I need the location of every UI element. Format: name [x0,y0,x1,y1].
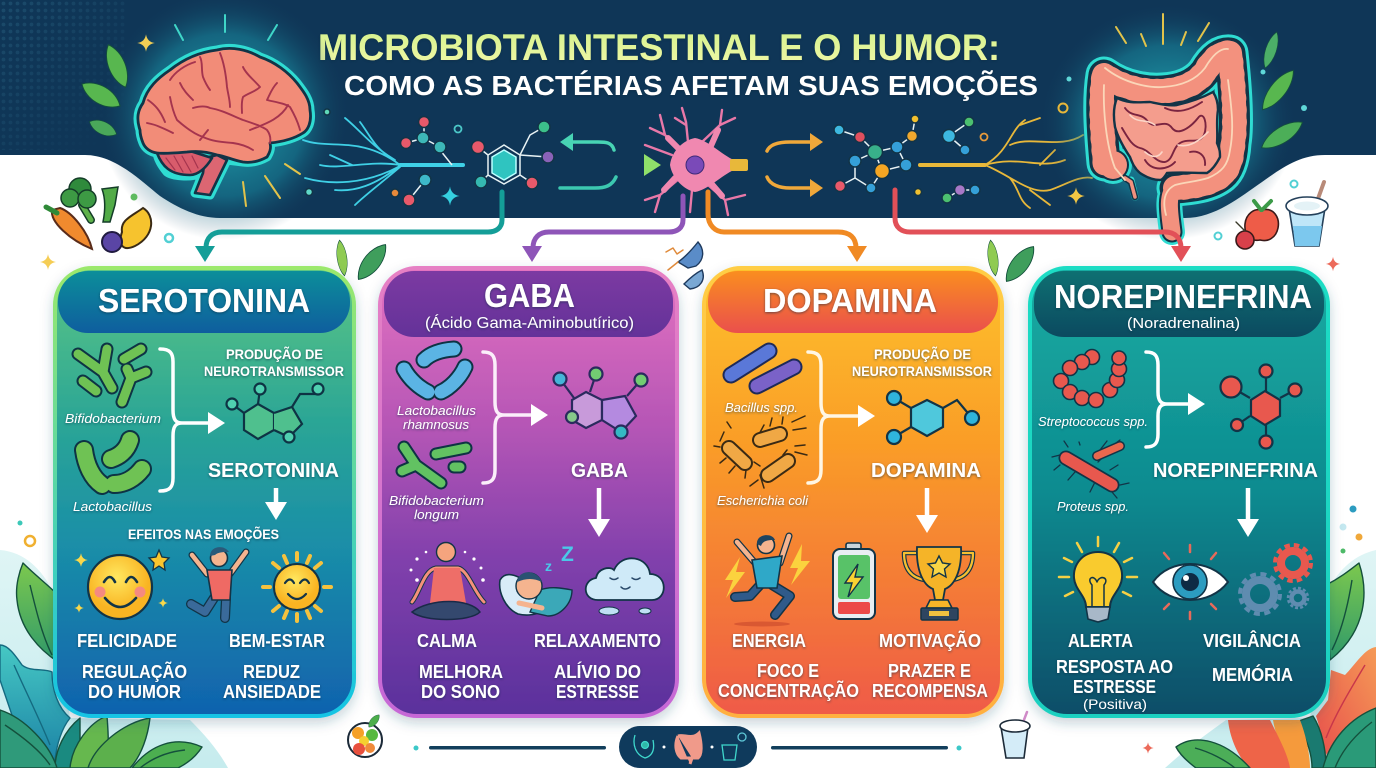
label: Lactobacillus rhamnosus: Lactobacillus [397,403,477,418]
effect labels: CONCENTRAÇÃO [718,680,859,701]
icon: fruit bowl [348,713,382,757]
label: Bifidobacterium longum [389,493,484,522]
effect labels: REGULAÇÃO [82,661,187,682]
panel heading: Norepinefrina: (Noradrenalina) [1127,315,1240,332]
panel heading: GABA [384,271,673,337]
text: Produção de neurotransmissor: PRODUÇÃO DE [226,345,323,362]
icon: GABA molecule [554,368,648,438]
effect labels [718,630,988,701]
connector: red arrow to Norepinefrina [895,190,1191,262]
icon: yogurt cup small [1000,712,1030,758]
label: Escherichia coli: Escherichia coli [717,493,809,508]
decoration: leaves above panels [335,239,1040,286]
text: Produção de neurotransmissor [852,345,992,379]
icon: Bacillus [731,351,794,386]
icon: Bifidobacterium longum [402,447,466,483]
label: Bifidobacterium: Bifidobacterium [65,411,161,426]
icon: Lactobacillus [84,440,142,485]
icon: dopamine molecule [887,391,979,444]
panel heading: Serotonina [58,271,350,333]
icon: norepinephrine molecule [1220,364,1302,448]
icon: synapse [666,242,703,289]
panel heading: Norepinefrina [1034,271,1324,337]
label: Bacillus spp.: Bacillus spp. [725,400,798,415]
label: Lactobacillus rhamnosus: rhamnosus [403,417,470,432]
icon: neuron [645,108,830,215]
effect labels: MOTIVAÇÃO [879,630,981,651]
effect labels: RESPOSTA AO [1056,657,1173,677]
icon: sun [263,553,331,621]
effect labels: RELAXAMENTO [534,631,661,651]
arrow: down [265,488,287,520]
effect labels: (Positiva) [1083,696,1147,712]
icon: Lactobacillus rhamnosus [404,349,465,392]
effect labels: DO SONO [421,682,500,702]
label: Streptococcus spp.: Streptococcus spp. [1038,414,1148,429]
title line 1: MICROBIOTA INTESTINAL E O HUMOR: [318,27,1000,68]
arrows: left feedback arrows [560,133,661,188]
icon: Z letters: z [545,558,552,574]
effect labels: VIGILÂNCIA [1203,630,1301,651]
decoration: footer line left [414,746,606,750]
icon: calm cloud [586,558,664,615]
effect labels: FELICIDADE [77,631,177,651]
text: Produção de neurotransmissor: NEUROTRANSMISSOR [852,363,992,379]
icon: Escherichia coli [714,416,807,488]
effect labels: REDUZ [243,662,300,682]
icon: eye [1153,545,1228,619]
effect labels: MELHORA [419,662,503,682]
effect labels: FOCO E [757,661,819,681]
icon: Z letters: Z [561,543,574,566]
nerve: left cyan branches [303,118,400,205]
panel heading: Norepinefrina: NOREPINEFRINA [1054,278,1312,315]
effect labels: PRAZER E [888,661,971,681]
panel: Dopamina [704,268,1002,716]
panel heading: Dopamina [708,271,998,333]
arrow: bracket to molecule [483,352,548,483]
decoration: footer line right [771,746,962,750]
arrow: bracket to molecule [160,349,225,491]
icon: meditating person [410,542,485,620]
text: Produção de neurotransmissor: PRODUÇÃO DE [874,345,971,362]
icon: light bulb [1059,537,1137,622]
header banner [0,0,1376,218]
label: Proteus spp.: Proteus spp. [1057,499,1129,514]
title line 2: COMO AS BACTÉRIAS AFETAM SUAS EMOÇÕES [344,70,1038,101]
effect labels: RECOMPENSA [872,681,988,701]
panel heading: GABA: GABA [484,277,575,314]
molecules: left cluster [306,109,554,206]
effect labels: MEMÓRIA [1212,664,1293,685]
effect labels: BEM-ESTAR [229,631,325,651]
label: Efeitos nas emoções: EFEITOS NAS EMOÇÕES [128,525,279,542]
label: Bifidobacterium longum: Bifidobacterium [389,493,484,508]
effect labels: CALMA [417,631,477,651]
icon: brain [99,0,349,240]
label: Serotonina: SEROTONINA [208,460,339,482]
icon: intestine leaves and sparks [1058,30,1307,205]
icon: vegetables [40,178,173,270]
effect labels: ESTRESSE [556,682,639,702]
icon: energetic person [725,535,810,626]
effect labels [1056,630,1301,712]
effect labels: ENERGIA [732,631,806,651]
effect labels: ANSIEDADE [223,682,321,702]
arrow: bracket to molecule [808,352,875,483]
title [318,27,1038,101]
effect labels: ESTRESSE [1073,677,1156,697]
arrow: down [1237,488,1259,537]
connector: orange arrow to Dopamina [708,192,867,262]
label: Norepinefrina: NOREPINEFRINA [1153,460,1318,482]
label: Lactobacillus rhamnosus [397,403,477,432]
effect labels [77,631,325,702]
effect labels: ALÍVIO DO [554,661,641,682]
effect labels [417,631,661,702]
text: Produção de neurotransmissor: NEUROTRANSMISSOR [204,363,344,379]
text: Produção de neurotransmissor [204,345,344,379]
effect labels: ALERTA [1068,631,1133,651]
arrows: right orange arrows [767,133,823,197]
icon: Z letters [545,543,574,574]
icon: battery [833,543,875,619]
arrow: down [916,488,938,533]
decoration: halftone dots [0,0,125,150]
label: Lactobacillus: Lactobacillus [73,499,153,514]
icon: apple and cherry [1236,201,1278,249]
icon: trophy [904,547,973,620]
icon: smiley [74,550,169,619]
effect labels: DO HUMOR [88,682,181,702]
icon: jumping person [191,547,246,618]
decoration: bottom-right foliage [1142,506,1376,768]
nerve: right yellow branches [920,118,1092,208]
connector: purple arrow to GABA [522,196,683,262]
icon: serotonin molecule [226,384,324,442]
panel: GABA [380,268,677,716]
icon: sleeping person [500,572,572,616]
panel: Norepinefrina [1030,268,1328,716]
decoration: bottom-left foliage [0,520,228,768]
footer emblem [619,726,757,768]
icon: Streptococcus chain [1054,350,1126,408]
label: Bifidobacterium longum: longum [414,507,459,522]
arrow: down [588,488,610,537]
panel heading: GABA: (Ácido Gama-Aminobutírico) [425,313,634,332]
connector: teal arrow to Serotonina [195,192,502,262]
panel heading: Serotonina: SEROTONINA [98,282,310,319]
icon: Proteus [1052,440,1129,498]
icon: yogurt cup [1214,180,1340,271]
label: GABA: GABA [571,460,628,482]
icon: gears [1240,545,1311,614]
icon: Bifidobacterium [78,349,146,402]
arrow: bracket to molecule [1146,352,1205,447]
icon: brain rays and leaves [78,15,300,206]
panel: Serotonina [55,268,354,716]
panel heading: Dopamina: DOPAMINA [763,282,937,319]
label: Dopamina: DOPAMINA [871,460,981,482]
icon: intestine [1040,4,1296,240]
molecules: right cluster [834,115,988,203]
